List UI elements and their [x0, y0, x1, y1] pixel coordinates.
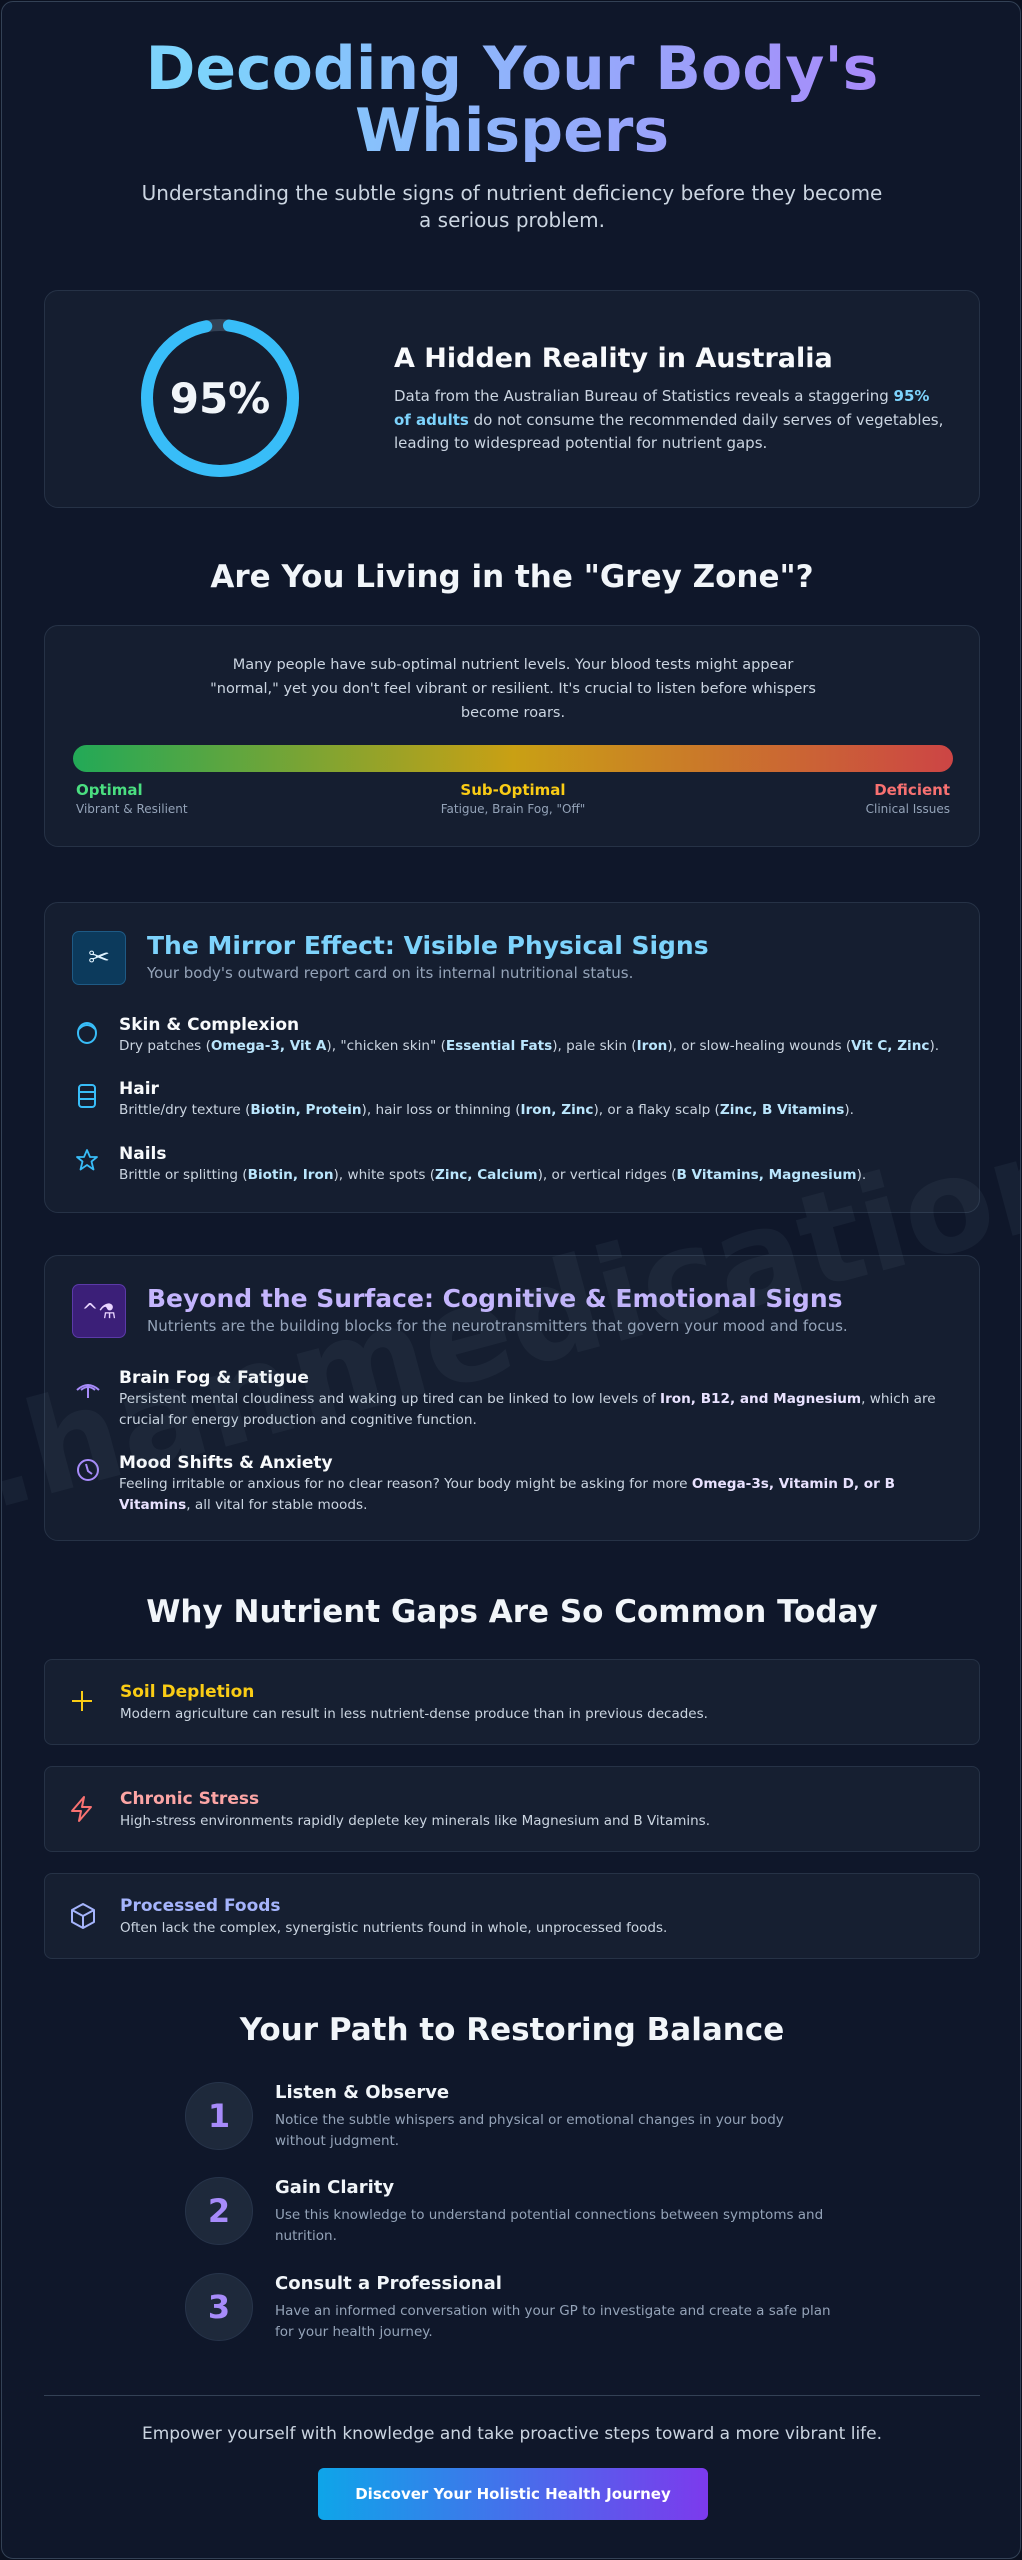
text block: Data from the Australian Bureau of Statistics reveals a staggering 95% of adults do not consume the recommended daily serves of vegetables, leading to widespread potential for nutrient gaps. — [394, 387, 943, 452]
step 1 — [185, 2082, 784, 2150]
title: Decoding Your Body's Whispers — [146, 34, 878, 166]
label: deficient — [866, 781, 950, 816]
panel: grey zone — [44, 625, 980, 847]
item: nails: Nails — [119, 1144, 166, 1164]
label: sub-optimal: Sub-Optimal — [460, 781, 566, 799]
button: Discover Your Holistic Health Journey — [355, 2485, 671, 2503]
panel: mirror effect — [44, 902, 980, 1213]
item: skin: Dry patches (Omega-3, Vit A), "chicken skin" (Essential Fats), pale skin (Iron), or slow-healing wounds (Vit C, Zinc). — [119, 1038, 939, 1054]
item: brain fog — [76, 1368, 936, 1428]
step 1: 1 — [208, 2097, 230, 2135]
icon: lightning — [71, 1796, 92, 1822]
panel: soil depletion: Modern agriculture can result in less nutrient-dense produce than in previous decades. — [120, 1706, 708, 1722]
label: optimal: Optimal — [76, 781, 143, 799]
footer text: Empower yourself with knowledge and take proactive steps toward a more vibrant life. — [142, 2424, 882, 2444]
title — [2, 38, 1022, 162]
item: mood: Mood Shifts & Anxiety — [119, 1453, 333, 1473]
icon: brain flask: ^⚗ — [82, 1299, 116, 1323]
panel: cognitive signs — [44, 1255, 980, 1541]
item: mood: Feeling irritable or anxious for no clear reason? Your body might be asking for more Omega-3s, Vitamin D, or B Vitamins, all vital for stable moods. — [119, 1476, 895, 1513]
label: sub-optimal: Fatigue, Brain Fog, "Off" — [441, 802, 585, 816]
heading: The Mirror Effect: Visible Physical Signs — [147, 931, 709, 960]
icon: box — [71, 1903, 95, 1929]
panel: chronic stress: Chronic Stress — [120, 1789, 259, 1809]
panel: hidden reality — [44, 290, 980, 508]
step 1: Notice the subtle whispers and physical or emotional changes in your body without judgment. — [275, 2112, 784, 2149]
step 2: 2 — [208, 2192, 230, 2230]
item: hair: Hair — [119, 1079, 159, 1099]
subtitle: Understanding the subtle signs of nutrient deficiency before they become a serious problem. — [142, 181, 882, 232]
item: brain fog: Persistent mental cloudiness and waking up tired can be linked to low levels of Iron, B12, and Magnesium, which are crucial for energy production and cognitive function. — [119, 1391, 936, 1428]
label: optimal — [76, 781, 188, 816]
button — [318, 2468, 708, 2520]
panel: processed foods — [44, 1873, 980, 1959]
item: mood — [77, 1453, 895, 1513]
item: brain fog: Brain Fog & Fatigue — [119, 1368, 309, 1388]
step 3 — [185, 2273, 831, 2341]
item: skin — [77, 1015, 939, 1054]
chart: 95% ring: 95% — [170, 374, 270, 423]
step 2: Use this knowledge to understand potential connections between symptoms and nutrition. — [275, 2207, 823, 2244]
item: hair: Brittle/dry texture (Biotin, Protein), hair loss or thinning (Iron, Zinc), or a flaky scalp (Zinc, B Vitamins). — [119, 1102, 854, 1118]
label: deficient: Clinical Issues — [866, 802, 950, 816]
panel: chronic stress: High-stress environments rapidly deplete key minerals like Magnesium and B Vitamins. — [120, 1813, 710, 1829]
item: skin: Skin & Complexion — [119, 1015, 299, 1035]
panel: soil depletion — [44, 1659, 980, 1745]
chart: spectrum bar — [73, 745, 953, 772]
heading: path: Your Path to Restoring Balance — [240, 2012, 784, 2048]
item: nails: Brittle or splitting (Biotin, Iron), white spots (Zinc, Calcium), or vertical ridges (B Vitamins, Magnesium). — [119, 1167, 866, 1183]
text block: Many people have sub-optimal nutrient levels. Your blood tests might appear "normal," yet you don't feel vibrant or resilient. It's crucial to listen before whispers become roars. — [210, 657, 816, 721]
icon: mirror — [72, 931, 126, 985]
heading: grey zone: Are You Living in the "Grey Zone"? — [210, 559, 814, 595]
step 1: Listen & Observe — [275, 2082, 449, 2103]
step 3: 3 — [208, 2288, 230, 2326]
step 3: Have an informed conversation with your GP to investigate and create a safe plan for your health journey. — [275, 2303, 831, 2340]
label: optimal: Vibrant & Resilient — [76, 802, 188, 816]
step 3: Consult a Professional — [275, 2273, 502, 2294]
heading: A Hidden Reality in Australia — [394, 343, 833, 374]
icon: mirror: ✂ — [88, 943, 110, 973]
chart: 95% ring — [141, 319, 299, 477]
icon: brain flask — [72, 1284, 126, 1338]
label: deficient: Deficient — [874, 781, 950, 799]
panel: processed foods: Often lack the complex, synergistic nutrients found in whole, unprocessed foods. — [120, 1920, 667, 1936]
panel: processed foods: Processed Foods — [120, 1896, 281, 1916]
item: nails — [76, 1144, 866, 1183]
heading: Beyond the Surface: Cognitive & Emotional Signs — [147, 1284, 842, 1313]
panel: cognitive signs: Nutrients are the building blocks for the neurotransmitters that govern your mood and focus. — [147, 1317, 848, 1335]
label: sub-optimal — [441, 781, 585, 816]
step 2 — [185, 2177, 823, 2245]
item: hair — [78, 1079, 854, 1118]
step 2: Gain Clarity — [275, 2177, 394, 2198]
panel: soil depletion: Soil Depletion — [120, 1682, 254, 1702]
panel: mirror effect: Your body's outward report card on its internal nutritional status. — [147, 964, 633, 982]
panel: chronic stress — [44, 1766, 980, 1852]
heading: why gaps: Why Nutrient Gaps Are So Common Today — [146, 1594, 878, 1630]
icon: plus — [72, 1691, 92, 1711]
